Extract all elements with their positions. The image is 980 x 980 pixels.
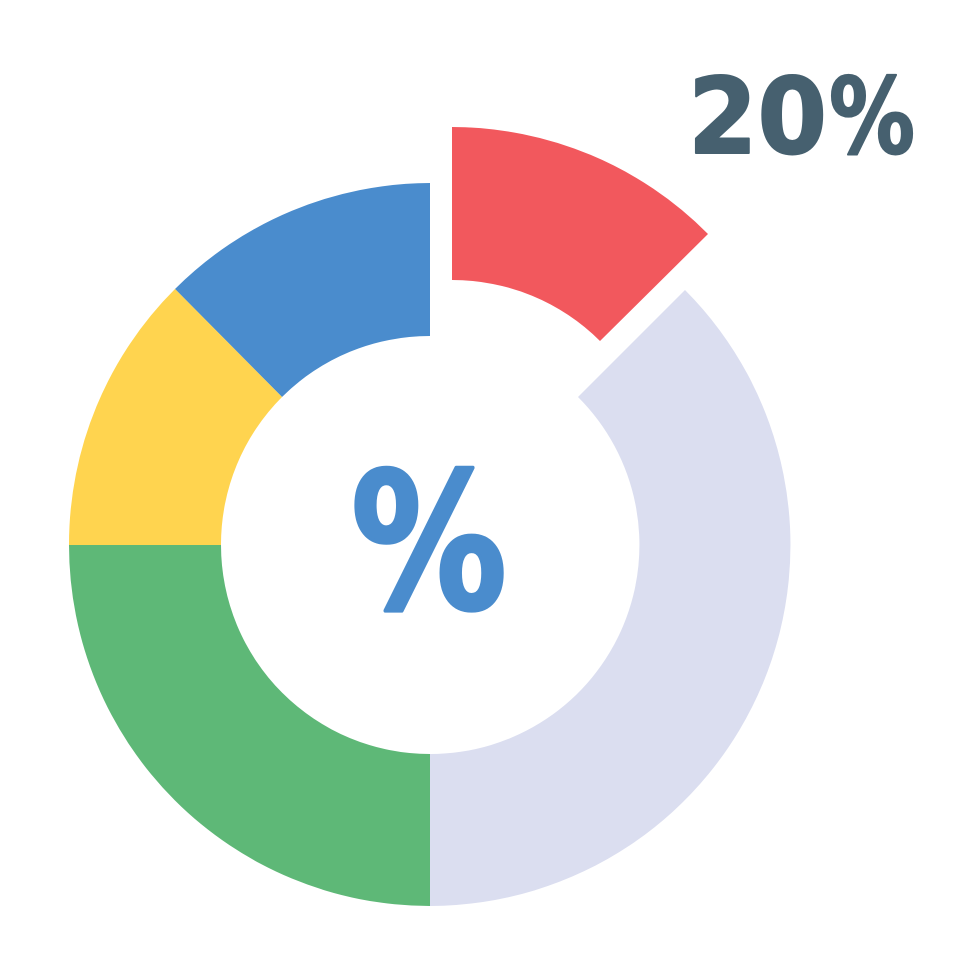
segment: yellow: [69, 289, 282, 545]
segment: red exploded slice: [452, 127, 708, 341]
segment: blue: [175, 183, 430, 397]
segment: lavender: [430, 290, 790, 906]
label: 20%: 20: [688, 56, 827, 178]
label: 20%: [688, 56, 915, 178]
icon: percent sign: %: [351, 433, 507, 653]
segment: green: [69, 545, 430, 906]
label: 20%: %: [829, 56, 915, 178]
